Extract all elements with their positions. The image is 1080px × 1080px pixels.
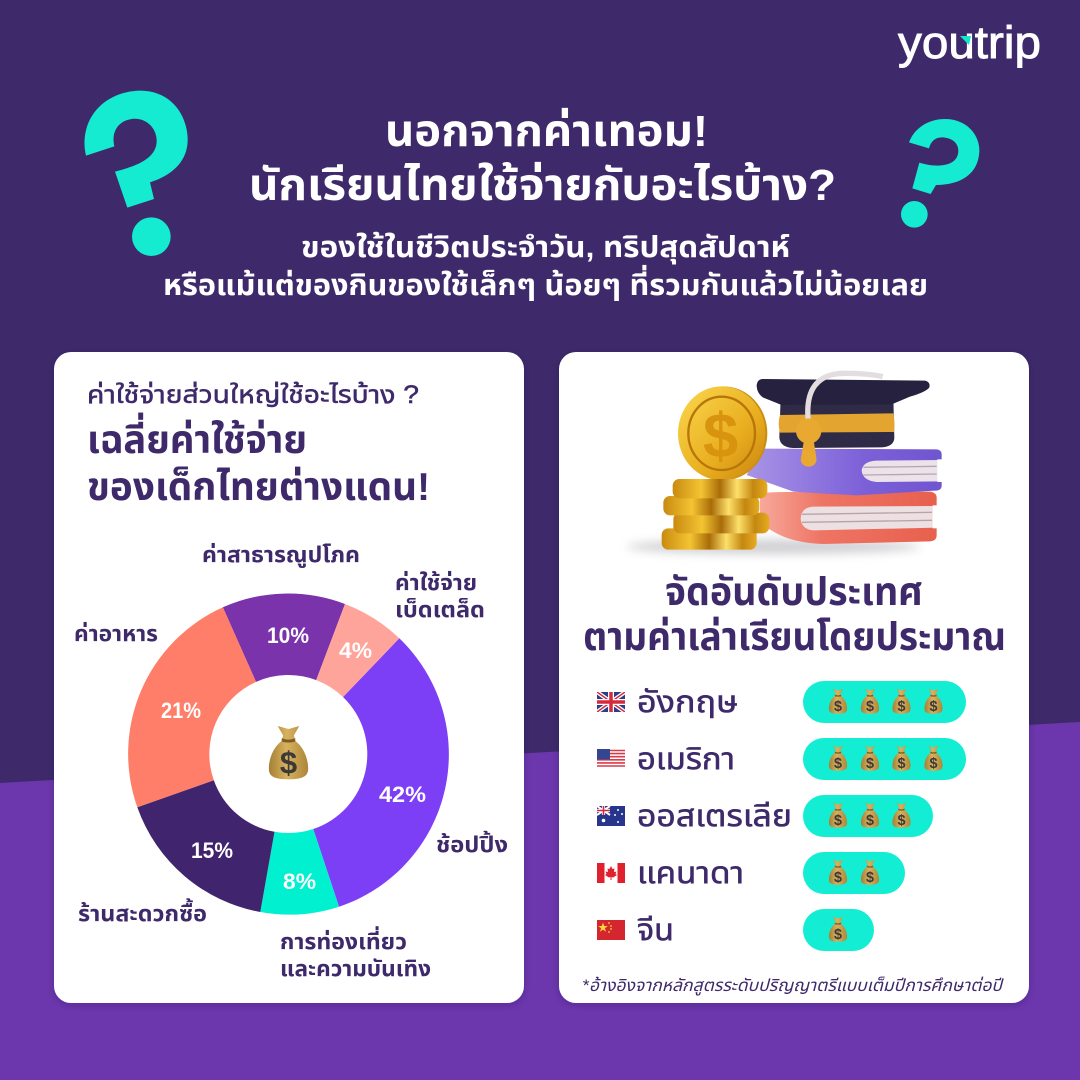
title: นอกจากค่าเทอม! bbox=[385, 107, 708, 156]
pill: rating 2 bbox=[803, 852, 905, 894]
panel heading bbox=[583, 571, 1006, 659]
pill: rating 4 bbox=[803, 681, 966, 723]
illustration: coins, cap and books bbox=[627, 373, 943, 554]
purple book bbox=[747, 449, 942, 495]
label: travel and entertainment: และความบันเทิง bbox=[280, 956, 431, 981]
label: miscellaneous: ค่าใช้จ่าย bbox=[395, 570, 477, 595]
row: United Kingdom: อังกฤษ bbox=[637, 686, 738, 719]
icon: money bag bbox=[269, 726, 308, 780]
row: Canada bbox=[597, 852, 905, 894]
row: Australia bbox=[597, 795, 933, 837]
panel kicker: ค่าใช้จ่ายส่วนใหญ่ใช้อะไรบ้าง ? bbox=[87, 381, 419, 409]
pill: rating 3 bbox=[803, 795, 933, 837]
value: 21%: 21% bbox=[161, 698, 201, 723]
donut chart bbox=[128, 594, 449, 915]
label: food: ค่าอาหาร bbox=[74, 621, 158, 646]
label: convenience store: ร้านสะดวกซื้อ bbox=[78, 898, 207, 926]
panel heading: ตามค่าเล่าเรียนโดยประมาณ bbox=[583, 616, 1006, 659]
subtitle: หรือแม้แต่ของกินของใช้เล็กๆ น้อยๆ ที่รวมกันแล้วไม่น้อยเลย bbox=[163, 264, 928, 302]
title: นักเรียนไทยใช้จ่ายกับอะไรบ้าง? bbox=[249, 161, 836, 210]
red book bbox=[760, 492, 937, 544]
slice: food 21% bbox=[128, 607, 256, 807]
row: China: จีน bbox=[637, 914, 674, 947]
icon: Australia flag bbox=[597, 806, 625, 826]
slice: misc 4% bbox=[316, 604, 399, 697]
value: 10%: 10% bbox=[267, 623, 309, 648]
icon: large question mark bbox=[84, 91, 188, 256]
slice: utilities 10% bbox=[223, 594, 345, 682]
footnote: *อ้างอิงจากหลักสูตรระดับปริญญาตรีแบบเต็มปีการศึกษาต่อปี bbox=[582, 976, 1005, 996]
coin bbox=[679, 386, 767, 480]
row: United States bbox=[597, 738, 966, 780]
coin stack bbox=[662, 528, 757, 550]
label: miscellaneous bbox=[395, 570, 485, 622]
illustration: coins, cap and books: $ bbox=[703, 401, 738, 471]
icon: US flag bbox=[597, 749, 625, 767]
value: 15%: 15% bbox=[191, 838, 233, 863]
row: China bbox=[597, 909, 874, 951]
label: miscellaneous: เบ็ดเตล็ด bbox=[395, 597, 485, 622]
value: 8%: 8% bbox=[283, 869, 316, 894]
logo: youtrip: youtrip bbox=[898, 17, 1041, 68]
slice: shopping 42% bbox=[313, 638, 449, 907]
icon: Canada flag bbox=[597, 863, 625, 883]
pill: rating 1 bbox=[803, 909, 874, 951]
panel heading bbox=[87, 412, 430, 509]
panel heading: จัดอันดับประเทศ bbox=[665, 571, 923, 614]
slice: convenience store 15% bbox=[137, 780, 274, 912]
icon: small question mark bbox=[901, 119, 979, 228]
pill: rating 4 bbox=[803, 738, 966, 780]
panel: tuition ranking bbox=[559, 352, 1029, 1003]
icon: China flag bbox=[597, 920, 625, 940]
label: shopping: ช้อปปิ้ง bbox=[436, 830, 508, 857]
graduation cap bbox=[779, 397, 894, 448]
title bbox=[249, 107, 836, 210]
subtitle bbox=[163, 232, 928, 302]
label: utilities: ค่าสาธารณูปโภค bbox=[202, 542, 360, 568]
row: Australia: ออสเตรเลีย bbox=[637, 800, 792, 833]
row: Canada: แคนาดา bbox=[637, 857, 744, 890]
label: travel and entertainment: การท่องเที่ยว bbox=[280, 926, 407, 954]
panel: average spending bbox=[54, 352, 524, 1003]
slice: travel 8% bbox=[260, 829, 339, 915]
panel heading: เฉลี่ยค่าใช้จ่าย bbox=[87, 412, 307, 462]
value: 42%: 42% bbox=[379, 782, 426, 807]
panel heading: ของเด็กไทยต่างแดน! bbox=[87, 466, 430, 509]
subtitle: ของใช้ในชีวิตประจำวัน, ทริปสุดสัปดาห์ bbox=[301, 232, 790, 264]
label: travel and entertainment bbox=[280, 926, 431, 981]
value: 4%: 4% bbox=[339, 638, 372, 663]
row: United States: อเมริกา bbox=[637, 743, 735, 776]
icon: UK flag bbox=[597, 692, 625, 712]
row: United Kingdom bbox=[597, 681, 966, 723]
